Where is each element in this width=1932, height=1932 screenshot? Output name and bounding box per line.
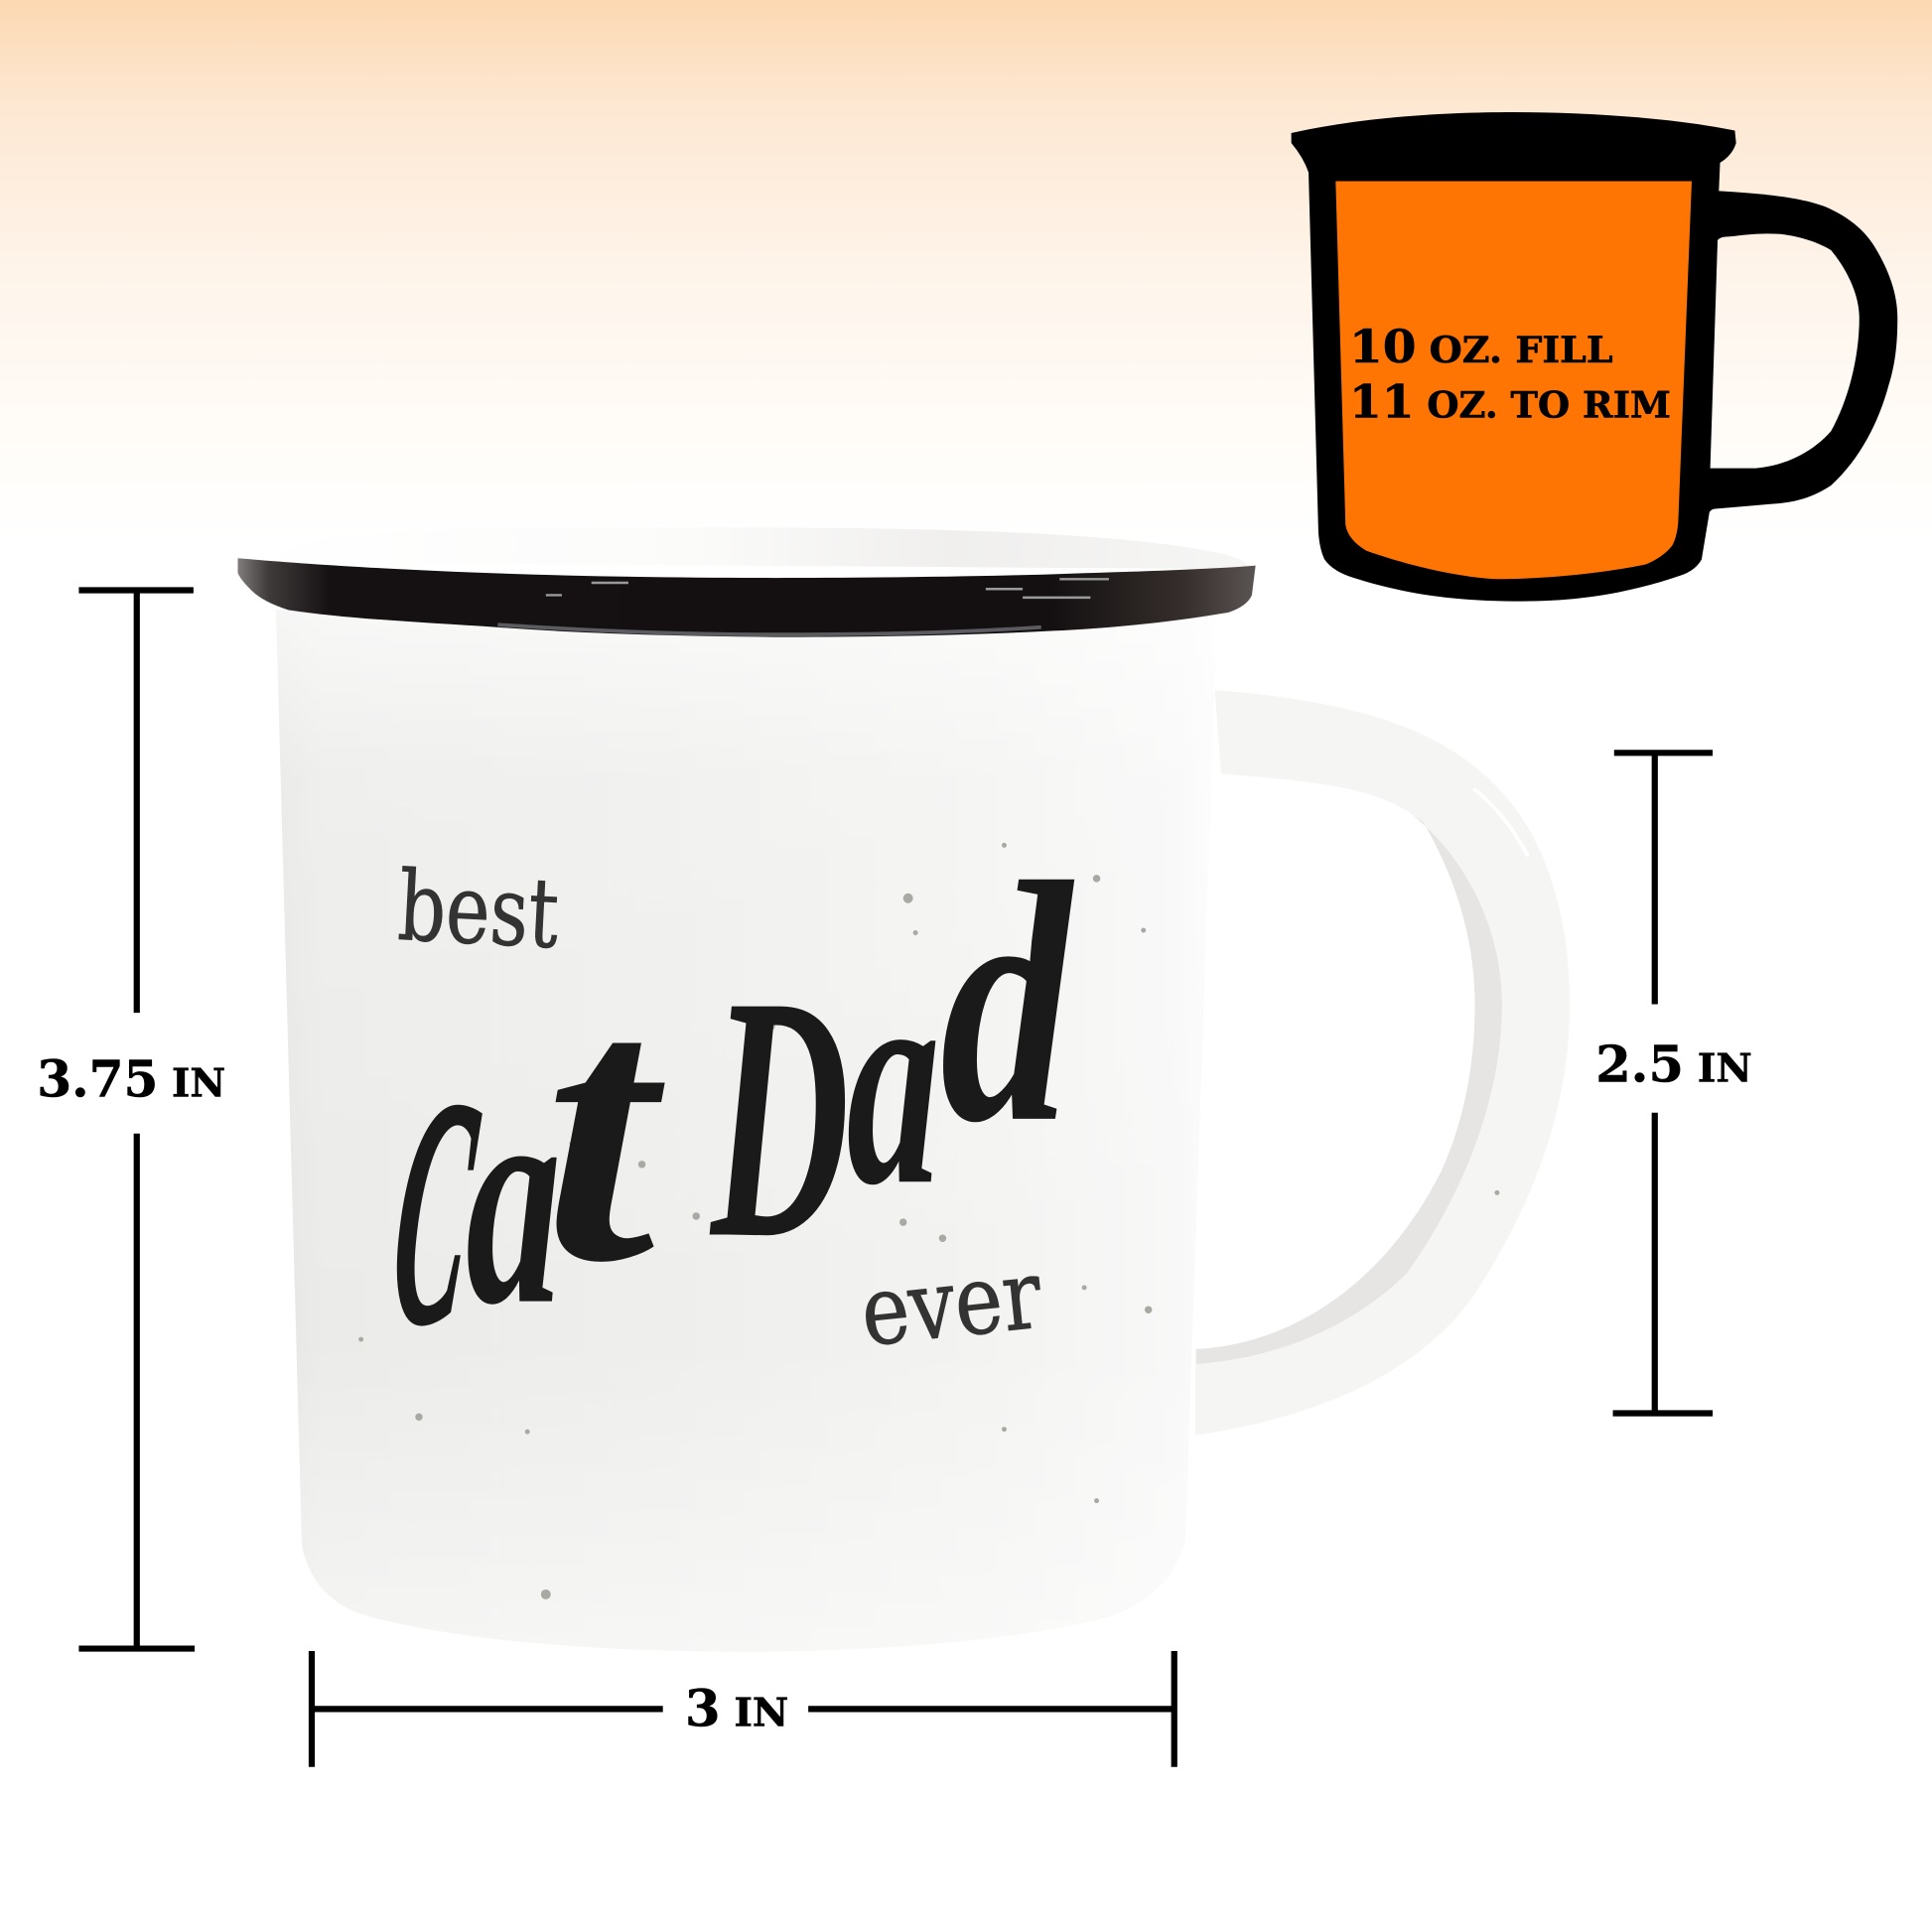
mug text: ever: ever [856,1238,1046,1368]
mug text: Dad [708,811,1075,1311]
mug text: Dad: d [940,811,1075,1193]
dimension: handle 2.5 in: 2.5 IN [1595,1035,1752,1094]
mug body [276,610,1217,1652]
dimension: height 3.75 in [37,590,225,1649]
mug text: best: best [395,850,562,970]
photo: white enamel mug [238,527,1570,1652]
mug interior [238,527,1256,569]
mug handle [1195,690,1570,1436]
capacity text: 11 oz to rim: 11 OZ. TO RIM [1349,375,1671,429]
mug text: Cat: t [543,918,669,1341]
mug text: Dad: D [708,924,850,1311]
background gradient [0,0,1932,542]
dimension: height 3.75 in: 3.75 IN [37,1049,225,1109]
mug text: Cat [379,918,669,1391]
capacity text: 10 oz fill: 10 OZ. FILL [1349,320,1613,373]
mug text: Cat: a [466,1027,561,1368]
black rim [238,558,1256,637]
mug text: Cat: C [379,1034,490,1391]
dimension: width 3 in: 3 IN [685,1679,788,1738]
mug text: Dad: a [847,913,940,1247]
icon: capacity mug [1292,112,1897,602]
dimension: handle 2.5 in [1595,753,1752,1414]
rim lower highlight [497,624,1041,634]
dimension: width 3 in [312,1651,1174,1767]
speckles [358,843,1499,1599]
